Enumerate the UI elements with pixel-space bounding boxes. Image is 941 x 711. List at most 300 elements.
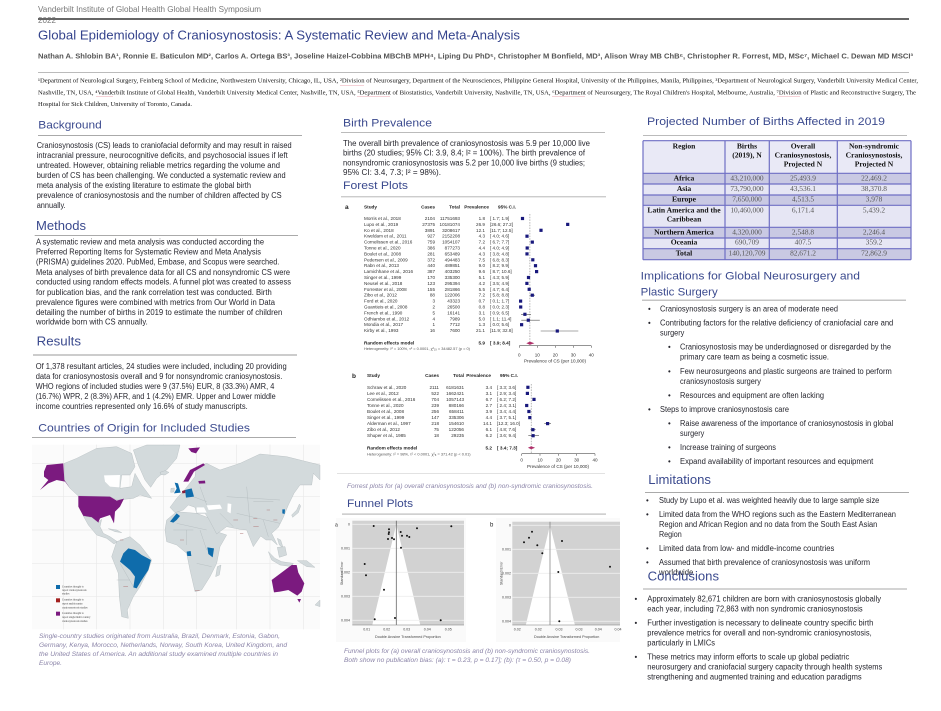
heading: methods: Methods	[36, 219, 86, 233]
text block: methods: A systematic review and meta analysis was conducted according the	[36, 238, 264, 247]
table header b: Cases	[425, 373, 439, 378]
study rows a: 26.9	[476, 222, 485, 227]
study rows a: 387	[427, 269, 435, 274]
study rows b: 147	[431, 415, 439, 420]
bullet list: conclusions: prevalence metrics for overall and non-syndromic craniosynostosis,	[647, 629, 872, 638]
funnel axis labels a: 0.003	[341, 594, 350, 598]
text block: methods: detailing the number of births in 2019 to estimate the number of children	[36, 308, 282, 317]
study rows b: 6.1	[486, 427, 492, 432]
heading: limitations: Limitations	[648, 473, 711, 487]
icon: japan	[292, 504, 301, 517]
study rows a: 877273	[445, 246, 460, 250]
panel: birth prevalence	[341, 118, 605, 177]
heading: birth prevalence: Birth Prevalence	[343, 118, 432, 130]
bullet list: implications: Steps to improve craniosynostosis care	[660, 405, 789, 414]
study rows a: 372	[427, 257, 435, 262]
study rows b: 6.2	[486, 433, 492, 438]
study rows b: 6181631	[446, 385, 464, 390]
study rows a: Kirby et al., 1993	[364, 328, 399, 333]
forest axis and markers b: 40	[592, 458, 598, 462]
bullet list: implications: •	[668, 457, 671, 466]
icon: central america	[83, 516, 117, 544]
bullet list: implications: •	[668, 367, 671, 376]
table body rows: 6,171.4	[792, 205, 814, 214]
funnel axis labels b: 0.004	[502, 620, 511, 624]
table: births by region	[643, 141, 911, 260]
bullet list: limitations: •	[646, 510, 649, 519]
study rows a: 386	[427, 246, 435, 250]
panel letter funnel a: a	[335, 522, 338, 528]
random effects model a: 5.9	[478, 341, 485, 346]
text block: methods: conducted using random effects models. A funnel plot was created to assess	[36, 278, 291, 287]
table body rows: 10,460,000	[730, 205, 764, 214]
heading: implications	[641, 270, 860, 298]
table header row	[673, 141, 902, 169]
study rows a: 295394	[445, 281, 460, 286]
table header row: Region	[673, 141, 696, 150]
text block: background: prevalence of craniosynostosis and the number of children affected by CS	[37, 191, 282, 200]
study rows a: 5.1	[479, 275, 485, 280]
study rows a: 281	[427, 251, 435, 256]
study rows a: 16141	[447, 310, 460, 315]
study rows a: 11751693	[440, 216, 460, 221]
bullet list: implications: Craniosynostosis surgery is an area of moderate need	[660, 305, 838, 314]
study rows b: [ 3.3; 3.6]	[497, 385, 516, 390]
text block: birth prevalence: births (20 studies; 95% CI: 3.9, 8.4; I² = 100%). The birth prevalence of	[343, 149, 586, 158]
study rows b	[367, 385, 520, 438]
study rows b: 239	[431, 403, 439, 408]
bullet list: limitations: •	[646, 558, 649, 567]
study rows b: [ 3.6; 9.4]	[497, 433, 516, 438]
study rows a: 155	[427, 287, 435, 292]
study rows b: Singer et al., 1999	[367, 415, 405, 420]
bullet list: conclusions	[634, 595, 882, 682]
study rows a: [ 4.7; 6.4]	[490, 287, 509, 292]
funnel axis labels a: 0.004	[341, 618, 350, 622]
study rows b: Zibo et al., 2012	[367, 427, 400, 432]
icon: new zealand	[315, 600, 320, 607]
study rows a: 489851	[445, 263, 460, 268]
icon: tasmania	[297, 599, 301, 603]
study rows a: 3208617	[442, 228, 460, 233]
table body rows: 43,536.1	[790, 184, 816, 193]
table body rows: 22,469.2	[861, 173, 887, 182]
bullet list: conclusions: particularly in LMICs	[647, 639, 715, 648]
study rows a: 1054107	[442, 240, 460, 245]
table body rows: Africa	[674, 173, 695, 182]
icon: alaska	[40, 463, 70, 490]
icon: madagascar	[216, 565, 221, 577]
symposium name: Vanderbilt Institute of Global Health Global Health Symposium	[38, 5, 261, 14]
map caption: Single-country studies originated from Australia, Brazil, Denmark, Estonia, Gabon,	[39, 633, 280, 640]
funnel plot b	[490, 522, 622, 639]
bullet list: conclusions: strengthening and augmented training and education paradigms	[647, 673, 862, 682]
funnel axis labels b: 0.002	[502, 572, 511, 576]
study rows a: 122006	[445, 293, 460, 298]
table header row: Craniosynostosis,	[775, 151, 831, 160]
heading: funnel plots: Funnel Plots	[347, 498, 413, 510]
panel letter b: b	[352, 373, 356, 380]
study rows a: 3891	[425, 228, 435, 233]
study rows b: [ 6.2; 7.2]	[497, 397, 516, 402]
table body rows: 359.2	[866, 237, 883, 246]
study rows a: Forrester et al., 2008	[364, 287, 407, 292]
panel: methods	[35, 219, 298, 326]
bullet list: conclusions: Approximately 82,671 children are born with craniosynostosis globally	[647, 595, 881, 604]
icon: ireland	[171, 488, 174, 492]
map legend: craniosynostosis studies	[62, 606, 88, 609]
study rows a: [11.9; 32.8]	[490, 328, 513, 333]
bullet list: conclusions: each year, including 72,863 with non syndromic craniosynostosis	[647, 605, 863, 614]
panel letter a: a	[345, 204, 349, 211]
study rows a: 123	[427, 281, 435, 286]
study rows a: Tonne et al., 2020	[364, 246, 401, 250]
bullet list: implications: Raise awareness of the importance of craniosynostosis in global	[680, 419, 894, 428]
study rows b: [12.3; 16.0]	[497, 421, 520, 426]
bullet list: implications: Contributing factors for the relative deficiency of craniofacial care and	[660, 319, 893, 328]
map legend: Countries thought to	[62, 585, 85, 588]
forest axis and markers b: 30	[574, 458, 580, 462]
funnel axis labels a	[340, 522, 452, 639]
study rows a: Morris et al., 2018	[364, 216, 401, 221]
icon: caribbean	[108, 529, 122, 533]
random effects model b: 5.2	[485, 445, 492, 450]
study rows a: Singer et al., 1999	[364, 275, 402, 280]
icon: estonia	[198, 481, 205, 484]
study rows a: 1	[432, 322, 435, 327]
study rows b: 335306	[449, 415, 464, 420]
table body rows: Oceania	[671, 237, 697, 246]
study rows b: 256	[431, 409, 439, 414]
heading: implications: Implications for Global Neurosurgery and	[641, 270, 860, 282]
study rows a: [ 4.0; 4.6]	[490, 234, 509, 239]
study rows a: Lupo et al., 2019	[364, 222, 399, 227]
study rows a: 335300	[445, 275, 460, 280]
study rows a: [ 3.8; 4.8]	[490, 251, 509, 256]
study rows a: 653489	[445, 251, 460, 256]
table body rows: 140,120,709	[729, 248, 766, 257]
study rows b: 2.7	[486, 403, 492, 408]
affiliations: Hospital for Sick Children, University of Toronto, Canada.	[38, 101, 192, 108]
study rows b: Shuper et al., 1985	[367, 433, 406, 438]
study rows a: 2104	[425, 216, 435, 221]
icon: iceland	[160, 471, 169, 475]
icon: south america	[112, 537, 152, 618]
study rows a: 0.7	[479, 299, 485, 304]
random effects model b: Heterogeneity: I² = 98%, τ² < 0.0001, χ²₈ = 371.42 (p < 0.01)	[367, 452, 471, 456]
study rows b: [ 4.8; 7.6]	[497, 427, 516, 432]
study rows a: 2152208	[442, 234, 460, 239]
table header b: Total	[453, 373, 464, 378]
icon: norway	[183, 463, 205, 482]
forest axis and markers a: Prevalence of CS (per 10,000)	[524, 359, 586, 364]
study rows a: Pedersen et al., 2009	[364, 257, 408, 262]
icon: greenland	[133, 445, 180, 487]
study rows a: [ 0.1; 1.7]	[490, 299, 509, 304]
study rows a: 4.2	[479, 281, 485, 286]
funnel axis labels b: Double Arcsine Transformed Proportion	[534, 635, 599, 639]
table header b	[367, 373, 518, 378]
icon: canada	[64, 447, 152, 500]
study rows b: Boulet et al., 2008	[367, 409, 404, 414]
funnel axis labels a: Standard Error	[340, 561, 344, 585]
affiliations: ¹Department of Neurological Surgery, Feinberg School of Medicine, Northwestern University, Chicago, IL, USA, ²Division of Neurosurgery, Department of the Neurosciences, Philippine General Hospital, University of the Philippines, Manila, Philippines, ³Department of Neurological Surgery, Vanderbilt University Medical Center,	[38, 78, 918, 85]
bullet list: limitations: Region	[659, 530, 682, 539]
funnel axis labels b: 0.04	[595, 628, 602, 632]
funnel axis labels b: 0.04	[614, 628, 622, 632]
study rows a: 1.8	[479, 216, 485, 221]
funnel axis labels b: 0.02	[514, 628, 521, 632]
study rows b: 3.4	[486, 385, 492, 390]
forest axis and markers b	[520, 384, 598, 469]
bullet list: limitations: Assumed that birth prevalence of craniosynostosis was uniform	[659, 558, 870, 567]
table body rows: Europe	[672, 195, 697, 204]
study rows a: 5.0	[479, 316, 485, 321]
panel: background	[37, 119, 302, 210]
table header row: Projected N	[855, 160, 894, 169]
table body rows: 690,709	[735, 237, 759, 246]
bullet list: implications: •	[648, 319, 651, 328]
funnel axis labels b: 0.003	[502, 596, 511, 600]
study rows a: [ 6.8; 8.3]	[490, 257, 509, 262]
affiliations: Nashville, TN, USA, ⁴Vanderbilt Institute of Global Health, Vanderbilt University Medical Center, Nashville, TN, USA, ⁵Department of Biostatistics, Vanderbilt University, Nashville, TN, USA, ⁶Department of Neurosurgery, The Royal Children's Hospital, Melbourne, Australia, ⁷Division of Plastic and Reconstructive Surgery, The	[38, 89, 916, 96]
map legend	[56, 585, 91, 623]
study rows a: 170	[427, 275, 435, 280]
study rows a: French et al., 1990	[364, 310, 403, 315]
icon: south korea	[282, 509, 285, 514]
panel: limitations	[645, 473, 909, 577]
text block: methods: (PRISMA) guidelines 2020. PubMed, Embase, and Scopus were searched.	[36, 258, 279, 267]
bullet list: implications: Expand availability of important resources and equipment	[680, 457, 874, 466]
study rows a: 4.4	[479, 246, 485, 250]
bullet list: conclusions: •	[634, 619, 638, 628]
study rows a: Zibo et al., 2012	[364, 293, 397, 298]
study rows b: Alderman et al., 1997	[367, 421, 411, 426]
bullet list: implications: •	[668, 391, 671, 400]
study rows a: 5.5	[479, 287, 485, 292]
table body rows: 2,548.8	[792, 227, 814, 236]
table header a: Prevalence	[464, 204, 489, 209]
text block: results: data for craniosynostosis overall and 9 for nonsyndromic craniosynostosis.	[36, 372, 282, 381]
study rows a: 7712	[450, 322, 460, 327]
text block: birth prevalence: 95% CI: 3.4, 7.3; I² = 98%).	[343, 168, 441, 177]
study rows a: 7.2	[479, 293, 485, 298]
table header row: Births	[737, 141, 757, 150]
random effects model a: Heterogeneity: I² = 100%, τ² = 0.0001, χ²₁₉ = 34482.57 (p = 0)	[364, 346, 471, 351]
table body rows: 4,320,000	[732, 227, 762, 236]
forest axis and markers a: 20	[553, 352, 558, 358]
bullet list: implications: surgery	[680, 429, 704, 438]
study rows b: 522	[431, 391, 439, 396]
text block: background	[37, 141, 292, 210]
icon: kenya	[207, 547, 214, 557]
bullet list: limitations: Limited data from low- and middle-income countries	[659, 544, 834, 553]
study rows b: [ 2.4; 3.1]	[497, 403, 516, 408]
panel: forest plots	[337, 180, 606, 490]
table body rows: Caribbean	[667, 214, 702, 223]
study rows b: 1057143	[446, 397, 464, 402]
text block: background: intracranial pressure, neurocognitive deficits, and psychosocial issues if left	[37, 151, 288, 160]
table body rows: 25,493.9	[790, 173, 816, 182]
table body rows	[647, 173, 887, 257]
bullet list: limitations: Region and African Region and no data from the South East Asian	[659, 520, 877, 529]
bullet list: limitations: Study by Lupo et al. was weighted heavily due to large sample size	[659, 496, 879, 505]
forest plot caption: Forrest plots for (a) overall craniosynostosis and (b) non-syndromic craniosynostosis.	[347, 483, 593, 490]
study rows a: Odhiambo et al., 2012	[364, 316, 410, 321]
table header a: Total	[449, 204, 460, 209]
icon: africa	[165, 512, 227, 592]
text block: results: WHO regions of included studies were 9 (37.5%) EUR, 8 (33.3%) AMR, 4	[36, 382, 275, 391]
random effects model a: Random effects model	[364, 341, 414, 346]
study rows b: [ 2.9; 3.4]	[497, 391, 516, 396]
icon: netherlands	[182, 490, 185, 493]
bullet list: limitations	[646, 496, 896, 577]
study rows a: [11.7; 12.5]	[490, 228, 513, 233]
text block: methods: worldwide born with CS annually.	[35, 317, 148, 326]
table body rows: 5,439.2	[863, 205, 885, 214]
panel: funnel plots	[335, 498, 622, 664]
bullet list: conclusions: •	[634, 595, 638, 604]
study rows a: Ko et al., 2018	[364, 228, 394, 233]
forest axis and markers a: 30	[571, 352, 576, 358]
forest axis and markers b: 20	[556, 458, 561, 462]
text block: birth prevalence: nonsyndromic craniosynostosis was 5.2 per 10,000 live births (9 studies;	[343, 158, 585, 168]
bullet list: limitations: Limited data from the WHO regions such as the Eastern Mediterranean	[659, 510, 896, 519]
bullet list: conclusions: Further investigation is necessary to delineate country specific birth	[647, 619, 873, 628]
study rows b: 704	[431, 397, 439, 402]
text block: background: burden of CS has been challenging. We conducted a systematic review and	[37, 171, 286, 180]
study rows b: 6.7	[486, 397, 492, 402]
map legend: report multicountry	[62, 602, 83, 605]
table header row: Non-syndromic	[849, 141, 900, 150]
study rows a: 9.6	[479, 269, 485, 274]
study rows a: 5	[432, 310, 435, 315]
forest axis and markers b: 0	[520, 458, 523, 462]
funnel axis labels a: 0.01	[363, 628, 370, 632]
study rows a: [ 8.2; 9.9]	[490, 263, 509, 268]
bullet list: implications: •	[668, 443, 671, 452]
table body rows: 4,513.5	[792, 195, 814, 204]
study rows a: [26.6; 27.2]	[490, 222, 513, 227]
study rows a: 3	[432, 299, 435, 304]
study rows a: Lamichhane et al., 2016	[364, 269, 413, 274]
study rows b: 3.1	[486, 391, 492, 396]
study rows a: 927	[427, 234, 435, 239]
funnel plot caption	[344, 648, 590, 664]
heading: conclusions: Conclusions	[648, 570, 719, 584]
table body rows: 2,246.4	[863, 227, 885, 236]
study rows a: 16	[430, 328, 435, 333]
table body rows: 73,790,000	[730, 184, 764, 193]
text block: background: untreated. However, obtaining reliable metrics regarding the volume and	[37, 161, 280, 170]
study rows b: 4.4	[486, 415, 492, 420]
table header row: (2019), N	[732, 151, 762, 160]
bullet list: implications: •	[648, 405, 651, 414]
icon: philippines	[277, 538, 283, 548]
funnel axis labels a: 0.04	[424, 628, 431, 632]
study rows a: Mondia et al., 2017	[364, 322, 404, 327]
table header a: Study	[364, 204, 377, 209]
icon: morocco	[170, 513, 180, 523]
study rows a: [ 4.3; 5.9]	[490, 275, 509, 280]
funnel axis labels b: 0.03	[576, 628, 582, 632]
study rows a: 4.3	[479, 234, 485, 239]
study rows b: Tonne et al., 2020	[367, 403, 404, 408]
forest axis and markers a: 10	[535, 352, 540, 358]
symposium name	[38, 5, 261, 25]
table header row: Overall	[791, 141, 815, 150]
study rows a: Boulet et al., 2008	[364, 251, 401, 256]
table header a	[364, 204, 516, 209]
bullet list: conclusions: neurosurgery and craniofacial surgery capacity through health systems	[647, 663, 882, 672]
study rows b: [ 3.4; 4.4]	[497, 409, 516, 414]
table body rows: 3,978	[866, 195, 883, 204]
heading: projected number of births: Projected Number of Births Affected in 2019	[647, 116, 885, 128]
funnel axis labels a: 0.02	[383, 628, 390, 632]
map caption: Germany, Kenya, Morocco, Netherlands, Norway, South Korea, United Kingdom, and	[39, 642, 287, 649]
table body rows: 43,210,000	[730, 173, 764, 182]
symposium name: 2022	[38, 16, 56, 25]
bullet list: implications: •	[668, 343, 671, 352]
study rows b: 75	[434, 427, 439, 432]
random effects model a	[364, 341, 511, 351]
bullet list: implications: Craniosynostosis may be underdiagnosed or disregarded by the	[680, 343, 891, 352]
text block: background: Craniosynostosis (CS) leads to craniofacial deformity and may result in raised	[37, 141, 292, 150]
forest plot a: overall craniosynostosis	[345, 204, 594, 364]
text block: methods: prevalence figures were combined with metrics from Our World in Data	[36, 298, 276, 307]
text block: birth prevalence: The overall birth prevalence of craniosynostosis was 5.9 per 10,000 live	[343, 139, 590, 148]
icon: germany	[185, 488, 194, 498]
funnel axis labels a: 0.001	[341, 546, 350, 550]
title: Global Epidemiology of Craniosynostosis: A Systematic Review and Meta-Analysis	[38, 27, 520, 42]
authors: Nathan A. Shlobin BA¹, Ronnie E. Baticulon MD², Carlos A. Ortega BS³, Joseline Haizel-Cobbina MBChB MPH⁴, Liping Du PhD⁵, Christopher M Bonfield, MD³, Alison Wray MB ChB⁶, Christopher R. Forrest, MD, MSc⁷, Michael C. Dewan MD MSCI³	[38, 52, 914, 61]
funnel points a	[364, 525, 452, 621]
panel letter funnel b: b	[490, 522, 494, 528]
table body rows: 407.5	[795, 237, 812, 246]
bullet list: implications: craniosynostosis surgery	[680, 377, 761, 386]
panel: results	[33, 335, 297, 411]
study rows a: [ 4.0; 4.9]	[490, 246, 509, 250]
table header b: Study	[367, 373, 380, 378]
study rows a: [ 0.0; 5.6]	[490, 322, 509, 327]
table header a: 95% C.I.	[498, 204, 516, 209]
study rows a: [ 0.0; 2.3]	[490, 304, 509, 310]
study rows b: 29235	[451, 433, 464, 438]
bullet list: limitations: •	[646, 496, 649, 505]
bullet list: implications	[648, 305, 894, 466]
study rows a: Cornelissen et al., 2016	[364, 240, 413, 245]
study rows a: 10181074	[440, 222, 460, 227]
study rows a: 1.3	[479, 322, 485, 327]
table body rows: 38,370.8	[861, 184, 887, 193]
study rows b: Lee et al., 2012	[367, 391, 399, 396]
study rows a: [ 8.7; 10.6]	[490, 269, 512, 274]
funnel plot caption: Both show no publication bias: (a): τ = 0.23, p = 0.17]; (b): (τ = 0.50, p = 0.08)	[344, 657, 571, 664]
affiliations	[38, 78, 918, 108]
bullet list: implications: •	[668, 419, 671, 428]
study rows a: [ 0.9; 6.5]	[490, 310, 509, 315]
funnel axis labels b	[500, 524, 622, 639]
header	[38, 5, 918, 108]
study rows a: 21.1	[476, 328, 485, 333]
world map	[32, 445, 320, 629]
heading: implications: Plastic Surgery	[641, 286, 718, 298]
text block: results: income countries represented only 16.6% of study manuscripts.	[36, 402, 248, 411]
funnel axis labels b: 0	[509, 524, 511, 528]
panel: projected number of births	[643, 116, 911, 260]
study rows a	[364, 216, 513, 333]
study rows a: 4.3	[479, 251, 485, 256]
